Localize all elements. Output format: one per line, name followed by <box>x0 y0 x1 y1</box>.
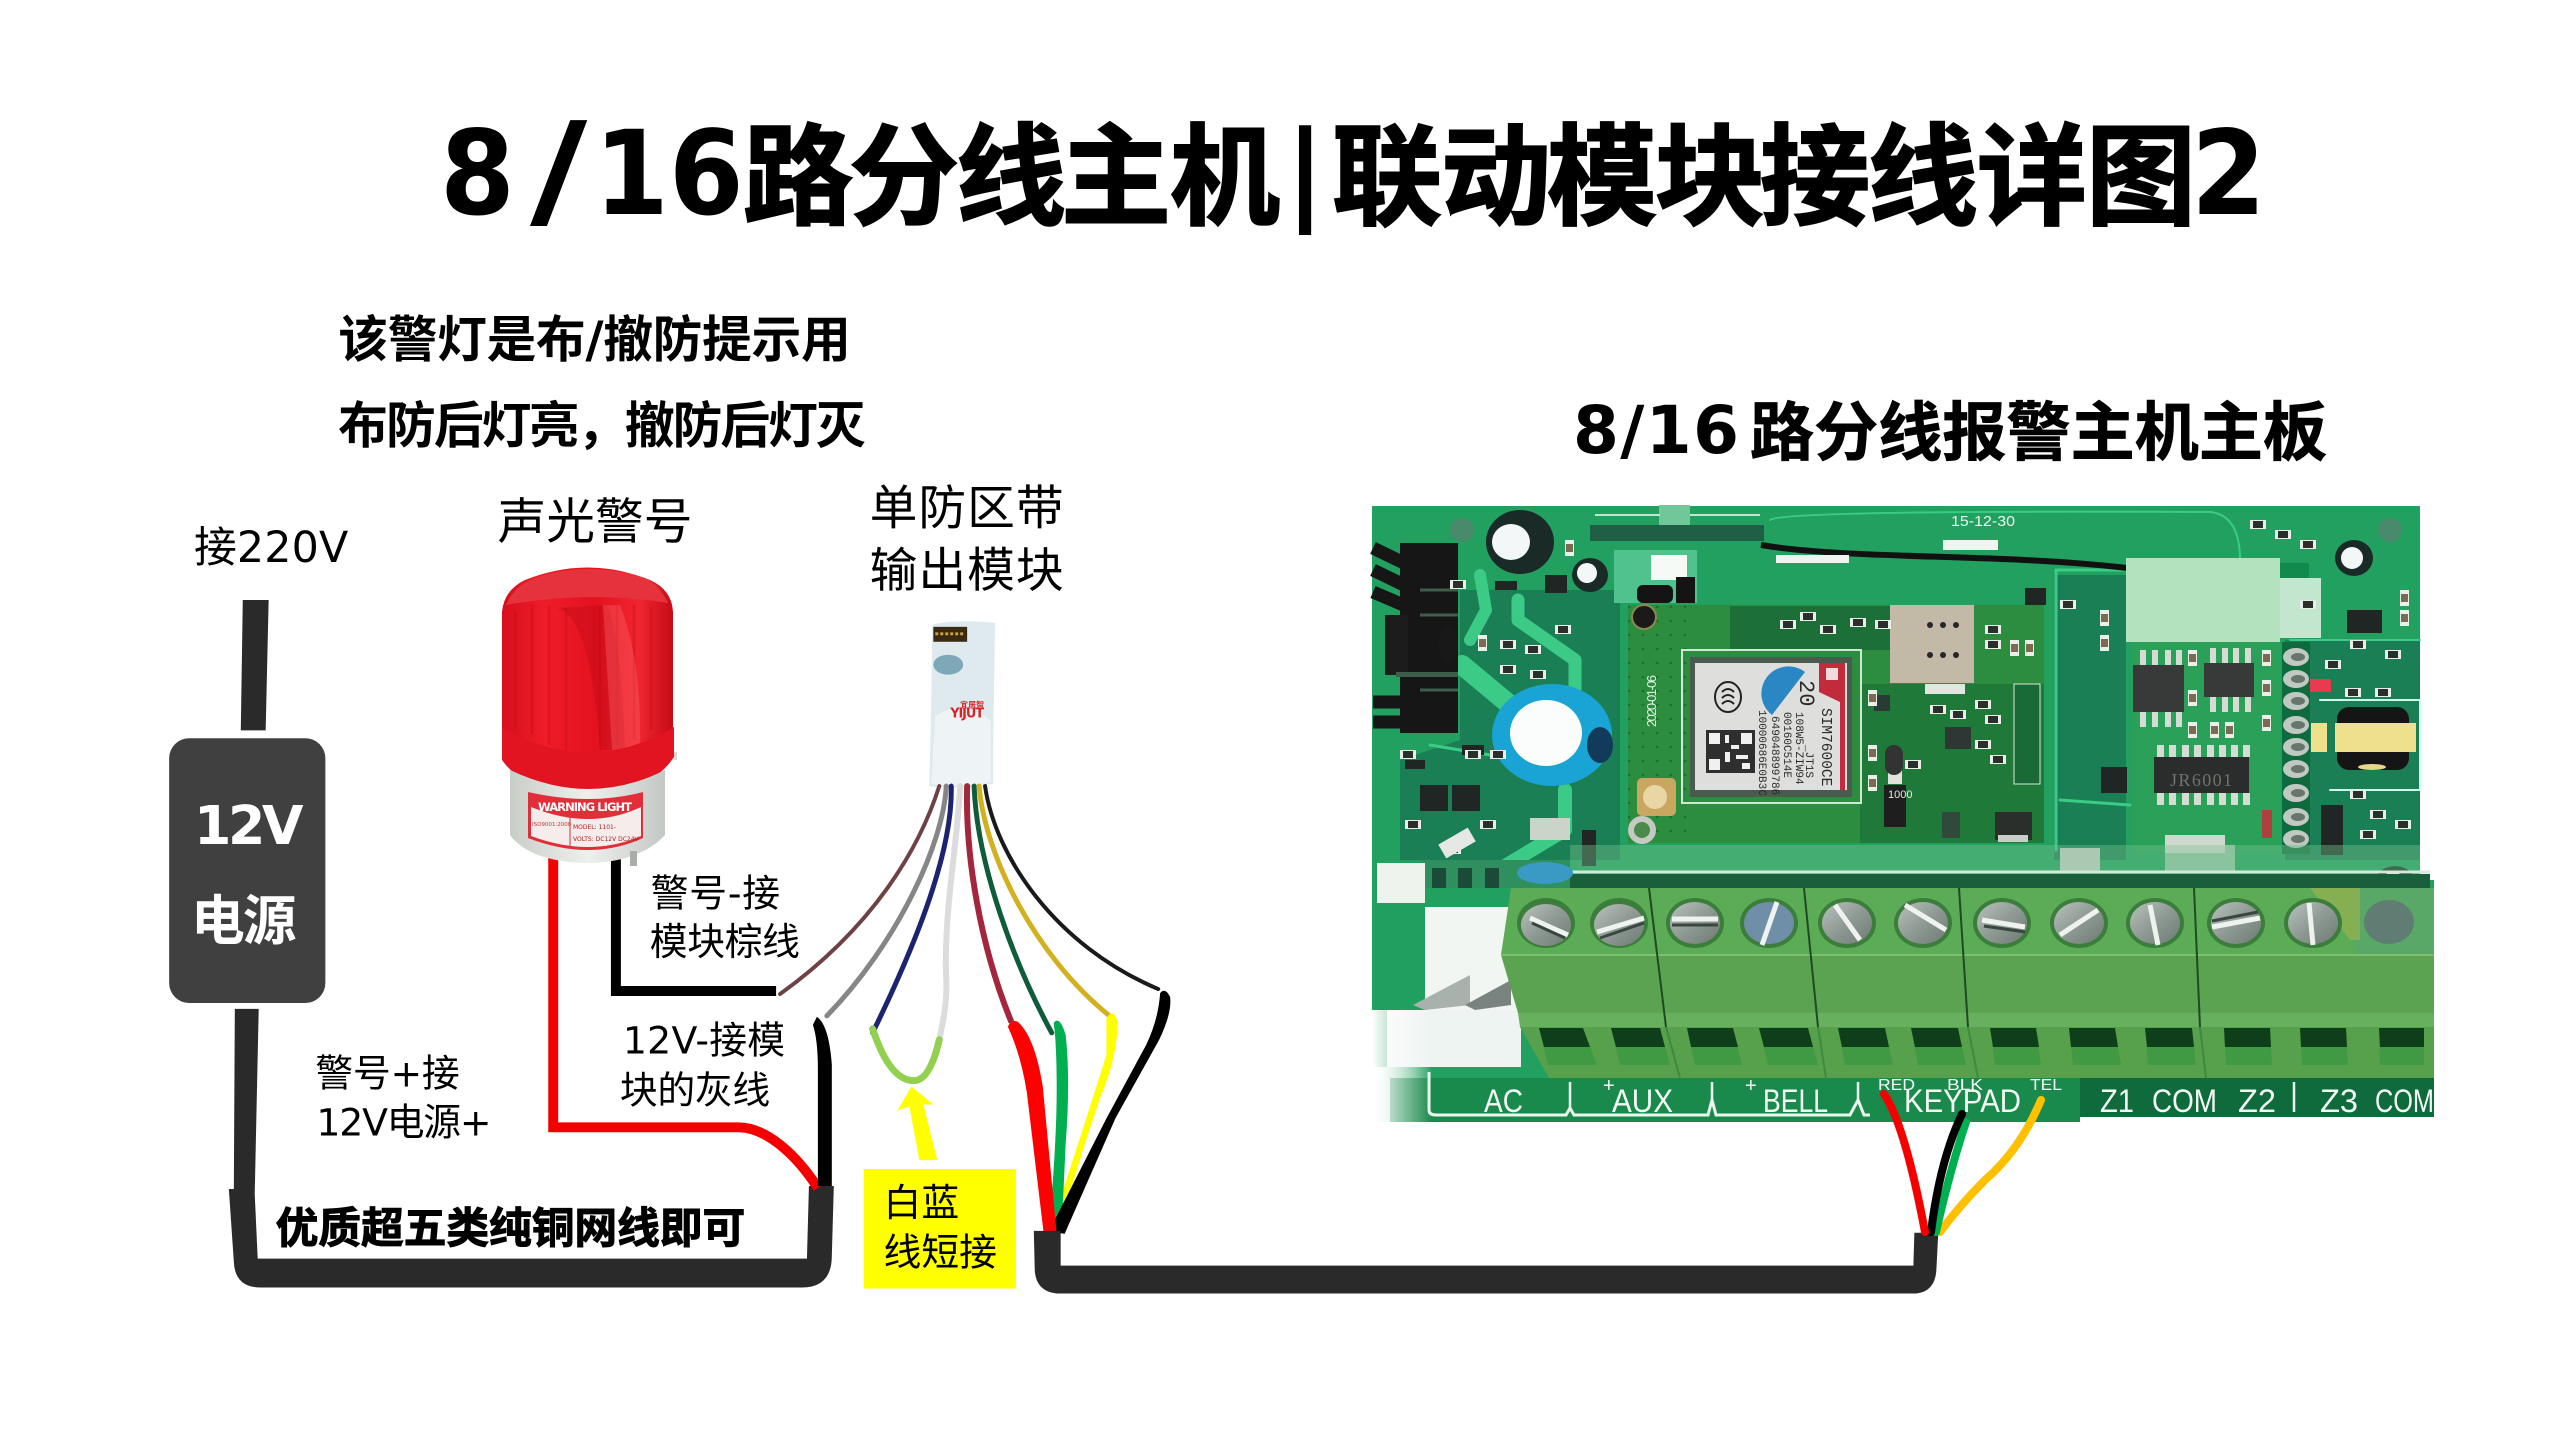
icon: siren: VOLTS: DC12V DC24V <box>573 836 640 843</box>
label: siren plus: 警号+接 <box>315 1052 460 1096</box>
terminal legend band: KEYPAD <box>1904 1083 2021 1119</box>
GSM module: 108W5-ZIW94 <box>1792 712 1804 785</box>
label: siren: 声光警号 <box>498 494 693 550</box>
arrow: yellow pointing to short link <box>897 1087 937 1160</box>
callout: short white and blue wires: 白蓝 <box>884 1181 959 1225</box>
icon: siren: MODEL: 1101- <box>573 824 616 831</box>
keypad wires <box>1884 1094 2041 1232</box>
icon: siren: WARNING LIGHT <box>538 800 632 814</box>
note about the warning light: 该警灯是布/撤防提示用 <box>338 311 851 369</box>
label: siren minus <box>650 871 800 964</box>
power input cable <box>241 600 269 730</box>
label: single zone output module <box>870 481 1064 599</box>
transformer <box>2311 707 2416 770</box>
wire: yellow <box>1055 1013 1117 1216</box>
logic sub-board <box>2132 642 2280 853</box>
GSM module: 2020-01-06 <box>1644 675 1659 727</box>
terminal legend band: + <box>1745 1075 1757 1097</box>
GSM module: 649048899786 <box>1768 716 1780 795</box>
mounting holes <box>1450 518 2402 542</box>
white-green connector <box>2126 558 2321 642</box>
terminal legend band: BLK <box>1947 1077 1983 1094</box>
GSM module: 20 <box>1793 680 1818 706</box>
terminal legend band: COM <box>2375 1083 2434 1119</box>
terminal block <box>1501 888 2434 1078</box>
dark pcb zones <box>1400 575 2420 860</box>
terminal legend band: Z3 <box>2320 1083 2358 1119</box>
label: 12V minus: 12V-接模 <box>623 1019 785 1063</box>
note about the warning light <box>338 311 866 455</box>
power supply box: 12V <box>194 794 304 857</box>
label: siren minus: 模块棕线 <box>650 920 800 964</box>
module wires <box>780 786 1158 1040</box>
terminal legend band: + <box>1603 1075 1615 1097</box>
cable label: 优质超五类纯铜网线即可 <box>276 1204 745 1254</box>
cable: power to module side <box>229 1009 834 1288</box>
title: | <box>1285 107 1325 236</box>
logic sub-board: JR6001 <box>2170 770 2232 790</box>
board base <box>1372 506 2434 1122</box>
label: siren plus <box>315 1052 492 1144</box>
title: 路分线主机 <box>743 114 1280 242</box>
terminal legend band: AC <box>1484 1083 1523 1119</box>
thick wires to module <box>1008 991 1170 1234</box>
title <box>440 95 2266 245</box>
title: 联动模块接线详图 <box>1332 114 2196 242</box>
siren wire: black <box>616 854 776 991</box>
output module: YIJUT <box>949 706 984 721</box>
short link: white and blue wires <box>873 1029 939 1081</box>
label: siren minus: 警号-接 <box>651 871 780 915</box>
GSM module: _JT1S <box>1802 744 1814 778</box>
terminal legend band: Z2 <box>2238 1083 2276 1119</box>
wire: brown <box>780 786 939 994</box>
wire: yellow to TEL <box>1940 1100 2041 1232</box>
note about the warning light: 布防后灯亮，撤防后灯灭 <box>338 397 866 455</box>
GSM module: SIM7600CE <box>1817 708 1833 786</box>
GSM module: 00160C514E <box>1780 712 1792 778</box>
icon: siren: ISO9001:2008 <box>532 822 572 828</box>
GSM module: 1000 <box>1888 789 1912 801</box>
output module <box>929 621 995 788</box>
label: 220V input: 接220V <box>194 523 348 573</box>
callout: short white and blue wires <box>864 1169 1016 1289</box>
main board <box>1372 505 2434 1123</box>
small capacitors <box>1486 510 2415 900</box>
cable: module to keypad <box>1034 1231 1938 1294</box>
callout: short white and blue wires: 线短接 <box>884 1231 997 1275</box>
traces <box>1430 512 2420 875</box>
terminal legend band: COM <box>2152 1083 2217 1119</box>
label: 12V minus <box>620 1019 785 1112</box>
power supply box: 电源 <box>191 889 297 952</box>
terminal legend band: RED <box>1878 1077 1915 1094</box>
red dip switch <box>2310 679 2331 692</box>
terminal legend band: TEL <box>2030 1077 2062 1094</box>
label: single zone output module: 单防区带 <box>870 481 1064 536</box>
translucent overlay band above terminals <box>1420 845 2430 888</box>
title: 8 <box>440 106 515 242</box>
icon: siren <box>502 568 677 866</box>
terminal legend band <box>1372 1067 2434 1123</box>
other chips <box>1405 575 2382 866</box>
wire clamp openings <box>1539 1028 2424 1065</box>
heading: main board: 路分线报警主机主板 <box>1750 397 2327 471</box>
heading: main board: 8/16 <box>1573 392 1739 469</box>
antenna module and lead <box>1590 505 2127 603</box>
label: 12V minus: 块的灰线 <box>620 1068 770 1112</box>
left connectors <box>1372 863 1521 1122</box>
terminal legend band: BELL <box>1763 1083 1828 1119</box>
output module: 宜居智 <box>960 699 984 709</box>
title: 16 <box>594 106 744 242</box>
label: single zone output module: 输出模块 <box>870 544 1064 599</box>
small components <box>1400 520 2411 858</box>
pin headers <box>1776 540 1998 563</box>
GSM module: 10000686E0B3C <box>1755 710 1767 796</box>
GSM module <box>1628 605 2044 843</box>
terminal legend band: AUX <box>1612 1083 1673 1119</box>
label: siren plus: 12V电源+ <box>316 1100 492 1144</box>
large capacitor <box>1492 684 1613 786</box>
silkscreen date: 15-12-30 <box>1951 513 2015 530</box>
terminal legend band: Z1 <box>2100 1083 2134 1119</box>
title: 2 <box>2191 106 2266 242</box>
black wire to power minus <box>813 1017 832 1186</box>
title: / <box>530 95 588 245</box>
heatsink <box>1373 543 1458 733</box>
siren wire: red <box>553 854 818 1188</box>
screw sockets <box>1517 898 2342 948</box>
solder pad column <box>2282 642 2310 854</box>
power supply box <box>169 738 325 1003</box>
